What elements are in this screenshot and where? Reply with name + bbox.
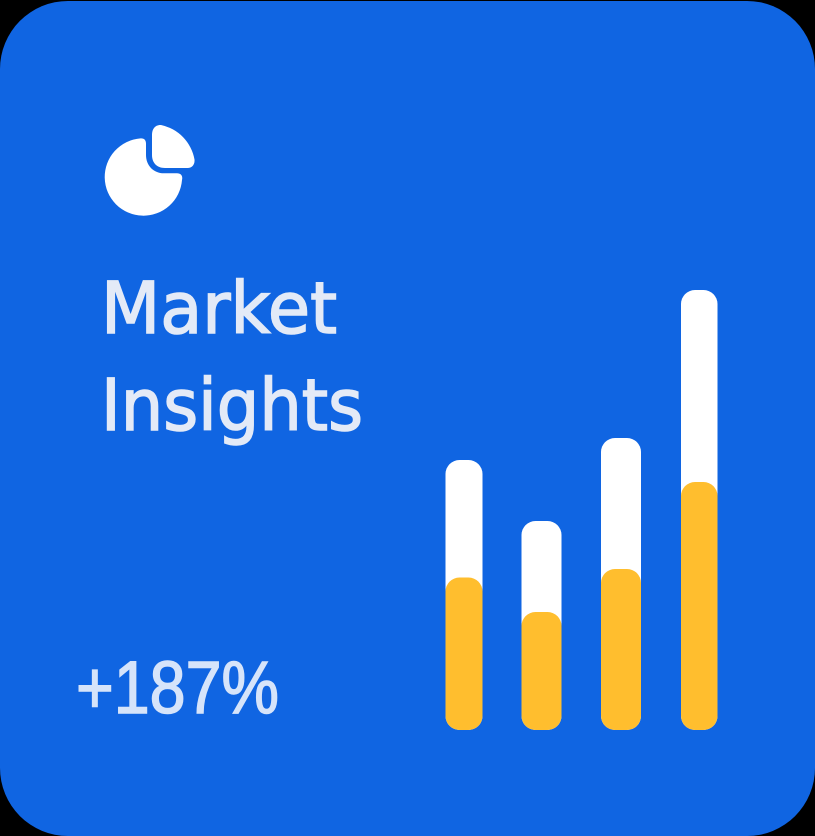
bar 3 [601,438,641,730]
bar 4 [681,290,718,730]
statistic: +187%: +187% [76,646,279,729]
heading: Market Insights [101,267,363,447]
icon: pie chart [105,125,195,216]
heading line: Market: Market [101,267,337,350]
bar 1 [446,460,482,730]
heading line: Insights: Insights [101,364,363,447]
icon part: main pie body [105,138,182,216]
bar chart [446,290,718,730]
icon part: detached pie slice [152,125,195,168]
bar 2 [522,521,562,730]
